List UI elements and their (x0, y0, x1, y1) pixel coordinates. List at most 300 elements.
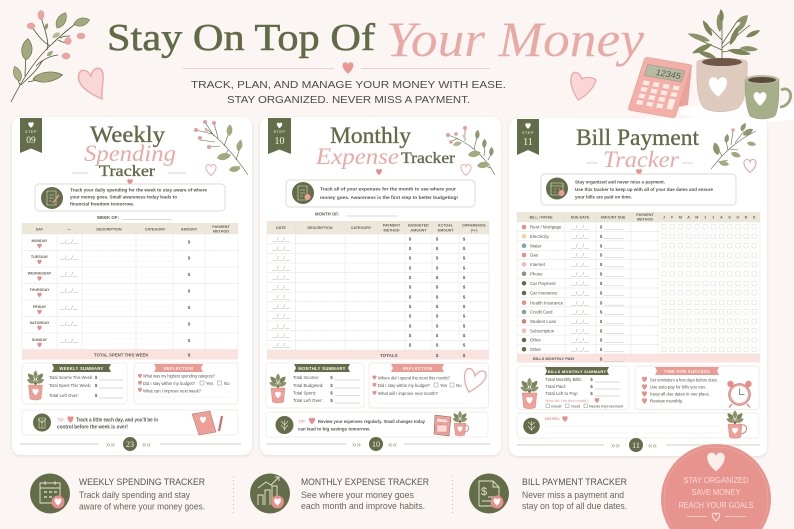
heading (315, 123, 456, 175)
intro callout (541, 174, 736, 205)
page footer 23 (20, 437, 241, 451)
bill table: __/__/__ (570, 319, 589, 324)
weekly table: $ (188, 288, 191, 294)
monthly table: __/__/__ (271, 256, 290, 261)
bill table: __/__/__ (570, 243, 589, 248)
monthly summary box: $ (330, 398, 333, 403)
icon: calendar (30, 474, 70, 514)
heading: Tracker (603, 147, 680, 172)
weekly table: $ (188, 240, 191, 244)
illustration: floral branch top left (11, 10, 91, 102)
intro callout: Track all of your expenses for the month to see where your (320, 186, 456, 192)
monthly table: __/__/__ (271, 285, 290, 290)
weekly summary box: Total Income This Week: (49, 375, 93, 380)
bill table: METHOD (637, 218, 653, 222)
icon: growth chart (250, 474, 290, 514)
weekly table: __/__/__ (59, 305, 78, 310)
tips for success box: Set reminders a few days before dues. (650, 378, 718, 382)
step ribbon 10 (268, 118, 291, 154)
bills monthly summary box: BILLS MONTHLY SUMMARY (548, 369, 606, 374)
monthly table: $ (409, 275, 412, 280)
weekly summary box: Total Spent This Week: (49, 383, 91, 388)
icon: pink heart right (571, 72, 596, 100)
monthly table: $ (463, 343, 466, 348)
bill table: $ (600, 262, 603, 267)
monthly table: $ (409, 294, 412, 299)
monthly table: __/__/__ (271, 343, 290, 348)
bill table: $ (600, 253, 603, 258)
subtitle: TRACK, PLAN, AND MANAGE YOUR MONEY WITH EASE. (191, 80, 506, 91)
illustration: potted plant (687, 9, 761, 112)
weekly summary box (22, 363, 127, 404)
bill table: $ (600, 356, 603, 362)
weekly table: $ (188, 338, 191, 343)
monthly table: $ (409, 323, 412, 328)
monthly table: $ (463, 285, 466, 290)
weekly table: __/__/__ (59, 239, 78, 244)
intro callout: Stay organized and never miss a payment. (575, 180, 665, 184)
page footer 10 (266, 437, 490, 451)
bill table: J (704, 216, 706, 220)
bill table: F (671, 216, 674, 220)
reflection box: Did I stay within my budget? (143, 381, 196, 386)
subtitle: STAY ORGANIZED. NEVER MISS A PAYMENT. (227, 95, 470, 106)
page footer 10: 10 (372, 440, 380, 449)
tip box (22, 410, 238, 435)
icon: mug with plant (725, 410, 747, 438)
monthly table: $ (463, 323, 466, 328)
illustration: coffee mug (745, 75, 791, 119)
bill table: BILLS MONTHLY PAID (533, 356, 574, 361)
monthly table: $ (436, 353, 439, 358)
tip box (266, 411, 488, 437)
weekly table: AMOUNT (181, 228, 198, 232)
intro callout: financial freedom tomorrow. (70, 202, 134, 206)
badge: stay organized: STAY ORGANIZED (684, 476, 749, 485)
weekly summary box: WEEKLY SUMMARY (59, 366, 104, 371)
monthly summary box: $ (330, 375, 333, 380)
monthly table: $ (436, 333, 439, 338)
bills monthly summary box: $ (590, 384, 593, 389)
week of field (97, 215, 172, 220)
monthly table: $ (436, 343, 439, 348)
bill table (517, 212, 760, 362)
bill table: __/__/__ (570, 225, 589, 230)
monthly table: $ (463, 256, 466, 261)
reflection box: What will I improve next month? (378, 391, 439, 396)
icon: bill document: $ (481, 486, 487, 498)
heading: Bill Payment (576, 125, 699, 151)
title (107, 11, 645, 67)
panel: monthly expense tracker (260, 117, 501, 455)
step ribbon 11: 11 (523, 137, 533, 148)
week of field: WEEK OF: (97, 215, 119, 220)
bills monthly summary box: Needs Improvement (589, 404, 624, 408)
bill table: __/__/__ (570, 272, 589, 276)
bills monthly summary box: Total Monthly Bills: (546, 377, 582, 382)
bill table: $ (600, 328, 603, 334)
monthly table: $ (409, 265, 412, 270)
weekly summary box: $ (95, 375, 98, 380)
page footer 11: »» (611, 441, 620, 450)
step ribbon 11 (517, 119, 539, 155)
bill table: S (728, 216, 731, 220)
weekly table: $ (188, 256, 191, 260)
monthly table: $ (463, 246, 466, 251)
monthly table: CATEGORY (351, 226, 372, 230)
feature: bill payment tracker (469, 474, 627, 514)
notes box (517, 410, 759, 438)
bill table: O (736, 216, 739, 220)
bill table: $ (600, 272, 603, 276)
bill table: __/__/__ (570, 328, 589, 334)
page footer 10: »» (352, 440, 361, 449)
monthly table: $ (463, 275, 466, 280)
bill table: $ (600, 310, 603, 315)
monthly table: $ (436, 236, 439, 242)
reflection box: REFLECTION (403, 366, 432, 371)
feature: monthly expense tracker: MONTHLY EXPENSE TRACKER (301, 477, 429, 488)
bill table: Electricity (530, 234, 550, 239)
intro callout: your bills are paid on time. (575, 194, 632, 200)
icon: notebook and pen (192, 411, 222, 435)
bill table: __/__/__ (570, 338, 589, 343)
page footer 23: «« (142, 440, 151, 449)
heading: Tracker (99, 163, 156, 180)
monthly table: METHOD (384, 228, 400, 232)
monthly table: $ (409, 314, 412, 319)
monthly table: __/__/__ (271, 323, 290, 328)
weekly table: __/__/__ (59, 272, 78, 276)
feature: weekly spending tracker (30, 474, 205, 514)
weekly summary box: Total Left Over: (49, 393, 79, 398)
bill table: Other (530, 347, 542, 352)
heading: Expense (315, 144, 399, 169)
heading: Tracker (401, 150, 456, 167)
bills monthly summary box (517, 366, 629, 410)
page footer 11 (517, 438, 760, 452)
badge: stay organized: REACH YOUR GOALS (678, 501, 754, 510)
bill table: D (753, 216, 756, 220)
monthly table: $ (409, 236, 412, 242)
tip box: Review your expenses regularly. Small changes today (318, 419, 425, 424)
bill table: Subscription (530, 328, 555, 334)
bill table: Rent / Mortgage (530, 225, 562, 230)
title: Stay On Top Of (107, 17, 375, 59)
monthly table: AMOUNT (437, 228, 454, 232)
monthly table: $ (463, 333, 466, 338)
feature: weekly spending tracker: aware of where your money goes. (79, 502, 205, 512)
weekly table: SATURDAY (30, 321, 50, 325)
bill table: $ (600, 300, 603, 305)
weekly table: $ (188, 272, 191, 277)
reflection box: Where did I spend the most this month? (378, 376, 451, 380)
bill table: PAYMENT (636, 213, 654, 217)
monthly summary box: Total Spent: (293, 390, 316, 396)
weekly table: $ (188, 322, 191, 326)
weekly table: MONDAY (31, 239, 48, 243)
weekly summary box: $ (95, 393, 98, 398)
weekly table: SUNDAY (32, 338, 48, 342)
monthly table: AMOUNT (410, 228, 427, 232)
page footer 11: «« (648, 441, 657, 450)
reflection box: No (456, 383, 462, 388)
bill table: N (745, 216, 748, 220)
monthly table: $ (436, 304, 439, 309)
bills monthly summary box: Great! (551, 404, 562, 408)
tip box: can lead to big savings tomorrow. (298, 426, 370, 432)
weekly table: THURSDAY (29, 288, 50, 292)
tips for success box (635, 366, 759, 410)
bill table: Water (530, 243, 542, 248)
intro callout: your money goes. Small awareness today leads to (70, 194, 177, 200)
weekly table: WEDNESDAY (28, 272, 52, 276)
weekly table: $ (188, 305, 191, 310)
step ribbon 10: 10 (274, 136, 284, 147)
monthly summary box: $ (330, 383, 333, 388)
illustration: calculator (628, 57, 692, 118)
weekly table: __/__/__ (59, 338, 78, 343)
icon: heart outline (465, 368, 486, 392)
bill table: __/__/__ (570, 281, 589, 286)
reflection box (134, 363, 238, 404)
feature: bill payment tracker: Never miss a payment and (522, 490, 624, 500)
bill table: BILL / PAYEE (529, 216, 553, 220)
weekly summary box: $ (95, 383, 98, 388)
weekly table: TOTAL SPENT THIS WEEK (94, 352, 149, 358)
monthly table: $ (436, 256, 439, 261)
page footer 23: »» (106, 440, 115, 449)
bill table: __/__/__ (570, 253, 589, 258)
weekly table: — (67, 228, 71, 232)
monthly table: $ (436, 294, 439, 299)
step ribbon 10: STEP (274, 130, 285, 134)
monthly table: (+/-) (471, 228, 478, 232)
panel: weekly spending tracker (12, 117, 252, 455)
step ribbon 09: STEP (25, 130, 37, 134)
monthly table: ACTUAL (438, 224, 454, 228)
monthly table: DIFFERENCE (462, 224, 486, 228)
bill table: $ (600, 291, 603, 296)
bill table: __/__/__ (570, 262, 589, 267)
bill table: Gas (530, 253, 539, 258)
illustration: calculator: 12345 (654, 67, 682, 81)
tips for success box: TIME FOR SUCCESS (664, 369, 710, 374)
monthly summary box: Total Income: (293, 375, 319, 380)
monthly summary box (266, 363, 364, 408)
feature: bill payment tracker: BILL PAYMENT TRACKER (522, 477, 627, 488)
monthly table: $ (409, 256, 412, 261)
bill table: __/__/__ (570, 291, 589, 296)
floral corner (194, 120, 248, 175)
monthly table: $ (463, 236, 466, 242)
feature: monthly expense tracker: See where your money goes (301, 490, 414, 500)
tip box: control before the week is over! (57, 424, 128, 430)
bill table: Car Insurance (530, 291, 558, 296)
monthly summary box: $ (330, 390, 333, 396)
tips for success box: Review monthly. (650, 398, 683, 404)
bill table: AMOUNT DUE (600, 216, 626, 220)
bill table: $ (600, 225, 603, 230)
bill table: __/__/__ (570, 310, 589, 315)
monthly table: $ (409, 285, 412, 290)
monthly table: __/__/__ (271, 333, 290, 338)
weekly table: __/__/__ (59, 288, 78, 293)
bill table: Internet (530, 262, 546, 267)
monthly table: __/__/__ (271, 314, 290, 319)
page footer 23: 23 (126, 440, 134, 449)
icon: alarm clock (727, 381, 752, 408)
weekly table: __/__/__ (59, 255, 78, 260)
icon: bill document (469, 474, 509, 514)
monthly table: $ (436, 246, 439, 251)
bills monthly summary box: Total Paid: (546, 384, 566, 389)
monthly table: $ (409, 343, 412, 348)
bills monthly summary box: Total Left to Pay: (546, 391, 578, 396)
intro callout: money goes. Awareness is the first step to better budgeting! (320, 195, 458, 200)
monthly table: __/__/__ (271, 304, 290, 309)
monthly table: __/__/__ (271, 275, 290, 280)
tip box: TIP: (298, 419, 306, 424)
monthly table: $ (409, 304, 412, 309)
tips for success box: Keep all due dates in one place. (650, 392, 710, 396)
panel: bill payment tracker (509, 118, 767, 456)
monthly table: $ (463, 314, 466, 319)
monthly table: $ (436, 265, 439, 270)
reflection box (369, 363, 488, 408)
bill table: J (663, 216, 665, 220)
page footer 11: 11 (632, 441, 640, 450)
bills monthly summary box: Good (571, 404, 580, 408)
monthly table: $ (436, 275, 439, 280)
notes box: NOTES: (545, 416, 560, 421)
intro callout: Use this tracker to keep up with all of your due dates and ensure (575, 187, 713, 192)
month of field (315, 212, 398, 216)
bills monthly summary box: $ (590, 377, 593, 382)
weekly table: __/__/__ (59, 321, 78, 326)
bill table: J (712, 216, 714, 220)
badge: stay organized (661, 444, 771, 529)
monthly table: $ (463, 294, 466, 299)
illustration: surface glow (680, 102, 794, 122)
heading (576, 125, 699, 175)
floral corner (446, 126, 495, 175)
monthly summary box: Total Left Over: (293, 398, 323, 403)
reflection box: What can I improve next week? (143, 388, 202, 394)
tips for success box: Use auto-pay for bills you can. (650, 384, 706, 390)
weekly table: FRIDAY (33, 305, 47, 309)
feature: bill payment tracker: stay on top of all due dates. (522, 501, 627, 511)
bill table: A (720, 216, 723, 220)
weekly table: CATEGORY (145, 228, 166, 232)
bill table: Phone (530, 272, 543, 276)
monthly table: $ (436, 314, 439, 319)
monthly table: __/__/__ (271, 236, 290, 242)
monthly table: $ (463, 265, 466, 270)
monthly table: PAYMENT (383, 224, 401, 228)
intro callout: Track your daily spending for the week to stay aware of where (70, 188, 207, 192)
bill table: Other (530, 338, 542, 343)
bill table: __/__/__ (570, 300, 589, 305)
tip box: Track a little each day, and you'll be in (76, 418, 158, 424)
bill table: A (687, 216, 690, 220)
reflection box: What was my highest spending category? (143, 374, 215, 378)
dotted separator (232, 476, 234, 514)
monthly table: DESCRIPTION (307, 226, 333, 230)
tip box: TIP: (57, 418, 65, 422)
bill table: $ (600, 281, 603, 286)
monthly table: __/__/__ (271, 294, 290, 299)
dotted separator (452, 476, 454, 514)
bill table: Student Loan (530, 319, 557, 324)
monthly table: BUDGETED (408, 224, 429, 228)
intro callout (286, 180, 475, 207)
weekly table (22, 223, 238, 360)
icon: calculator and mug (434, 411, 469, 436)
monthly table: __/__/__ (271, 246, 290, 251)
page footer 10: «« (388, 440, 397, 449)
bill table: __/__/__ (570, 234, 589, 239)
bill table: $ (600, 319, 603, 324)
feature: monthly expense tracker (250, 474, 429, 514)
reflection box: No (224, 381, 230, 386)
weekly table: PAYMENT (212, 225, 230, 229)
step ribbon 09 (20, 118, 42, 153)
monthly table: $ (409, 333, 412, 338)
weekly table: DESCRIPTION (96, 228, 122, 232)
bill table: M (695, 216, 698, 220)
reflection box: Yes (206, 381, 214, 386)
step ribbon 11: STEP (522, 131, 534, 135)
heading: Spending (84, 141, 176, 166)
reflection box: REFLECTION (164, 366, 193, 371)
floral corner (711, 122, 756, 172)
bill table: __/__/__ (570, 347, 589, 352)
weekly table: $ (188, 352, 191, 358)
intro callout (35, 184, 225, 211)
bills monthly summary box: $ (590, 391, 593, 396)
feature: weekly spending tracker: WEEKLY SPENDING TRACKER (79, 477, 205, 488)
weekly table: DAY (36, 228, 44, 232)
monthly summary box: MONTHLY SUMMARY (298, 366, 346, 371)
month of field: MONTH OF: (315, 212, 340, 216)
reflection box: Did I stay within my budget? (378, 383, 431, 388)
feature: weekly spending tracker: Track daily spending and stay (79, 490, 190, 500)
monthly table: $ (463, 353, 466, 358)
monthly table: TOTALS (380, 353, 398, 358)
monthly table: $ (436, 285, 439, 290)
icon: pink heart left (78, 68, 103, 99)
monthly summary box: Total Budgeted: (293, 383, 324, 388)
monthly table (267, 221, 489, 360)
title: Your Money (386, 11, 645, 67)
heading (72, 122, 186, 185)
heading: Monthly (330, 123, 411, 149)
monthly table: $ (436, 323, 439, 328)
heading: Weekly (90, 122, 165, 148)
bill table: Health Insurance (530, 300, 564, 305)
feature: monthly expense tracker: each month and improve habits. (301, 501, 425, 511)
monthly table: DATE (276, 226, 286, 230)
bill table: Car Payment (530, 281, 556, 286)
bill table: $ (600, 347, 603, 352)
step ribbon 09: 09 (26, 136, 36, 146)
reflection box: Yes (440, 383, 448, 388)
subtitle (191, 80, 506, 106)
bill table: $ (600, 234, 603, 239)
monthly table: $ (463, 304, 466, 309)
bill table: Credit Card (530, 310, 553, 315)
